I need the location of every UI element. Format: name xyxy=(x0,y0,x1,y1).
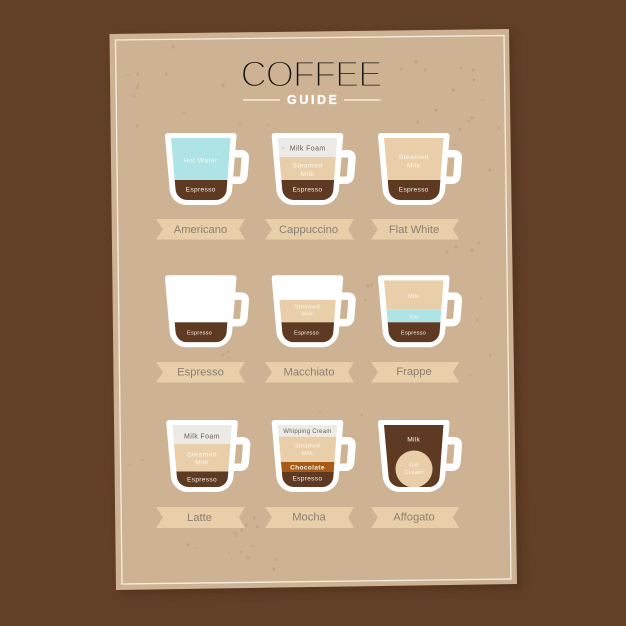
cup: Cappuccino: Espresso xyxy=(292,186,322,194)
cup: Flat White: Espresso xyxy=(399,186,429,194)
item: Frappe xyxy=(371,275,459,382)
cup: Macchiato xyxy=(272,275,352,347)
item: Cappuccino xyxy=(265,133,354,240)
item: Affogato xyxy=(371,420,459,528)
inner border xyxy=(116,36,511,584)
item: Mocha xyxy=(265,420,354,528)
cup: Flat White: Milk xyxy=(407,162,421,170)
cup: Macchiato: Milk xyxy=(302,312,313,318)
ribbon: Americano: Americano xyxy=(174,224,227,236)
item: Macchiato xyxy=(265,275,354,382)
cup: Mocha xyxy=(272,420,352,492)
ribbon: Macchiato: Macchiato xyxy=(284,366,334,378)
item: Americano xyxy=(156,133,245,240)
cup: Cappuccino: Milk xyxy=(301,171,314,178)
cup: Mocha: Steamed xyxy=(295,444,320,450)
right title rule xyxy=(344,99,380,101)
cup: Macchiato: Espresso xyxy=(294,330,319,336)
cup: Americano: Espresso xyxy=(186,186,216,194)
foam bubble xyxy=(282,147,284,149)
ribbon: Cappuccino: Cappuccino xyxy=(279,224,338,236)
cup: Flat White xyxy=(378,133,458,205)
cup: Frappe xyxy=(378,275,458,347)
cup: Flat White: Steamed xyxy=(399,154,429,161)
cup: Latte: Milk xyxy=(195,460,209,466)
cup: Cappuccino: Milk Foam xyxy=(290,146,326,152)
cup: Latte: Steamed xyxy=(187,452,217,458)
item: Flat White xyxy=(371,133,459,240)
cup: Americano: Hot Water xyxy=(184,158,218,164)
ribbon: Frappe: Frappe xyxy=(396,366,432,378)
cup: Affogato xyxy=(378,420,458,492)
cup: Mocha: Chocolate xyxy=(290,465,325,472)
cup: Frappe: Ice xyxy=(409,314,418,320)
cup: Cappuccino: Steamed xyxy=(292,162,322,170)
item: Latte xyxy=(156,420,247,528)
cup: Frappe: Espresso xyxy=(401,330,426,336)
cup: Mocha: Whipping Cream xyxy=(283,429,331,435)
title xyxy=(240,54,382,107)
cup: Macchiato: Steamed xyxy=(295,304,320,310)
poster paper xyxy=(110,29,517,590)
cup: Affogato: Ice xyxy=(410,462,418,468)
cup: Latte: Espresso xyxy=(187,476,217,484)
cup: Frappe: Milk xyxy=(408,294,419,300)
ribbon: Flat White: Flat White xyxy=(389,224,439,236)
cup: Americano xyxy=(165,133,245,205)
ribbon: Espresso: Espresso xyxy=(177,366,224,378)
item: Espresso xyxy=(156,275,245,382)
cup: Affogato: Cream xyxy=(405,470,423,476)
cup: Espresso: Espresso xyxy=(187,330,212,336)
paper speckles xyxy=(127,46,500,570)
ribbon: Mocha: Mocha xyxy=(292,512,327,524)
heading: coffee: COFFEE xyxy=(240,54,382,94)
cup: Mocha: Milk xyxy=(302,451,313,457)
cup: Mocha: Espresso xyxy=(292,475,322,482)
left title rule xyxy=(243,99,280,101)
poster shadow xyxy=(113,33,522,595)
cup: Affogato: Milk xyxy=(407,436,421,443)
cup: Latte: Milk Foam xyxy=(184,434,220,440)
cup: Cappuccino xyxy=(272,133,352,205)
ribbon: Latte: Latte xyxy=(187,512,212,524)
heading: guide: GUIDE xyxy=(287,93,337,107)
ribbon: Affogato: Affogato xyxy=(393,512,435,524)
cup: Latte xyxy=(166,420,247,492)
